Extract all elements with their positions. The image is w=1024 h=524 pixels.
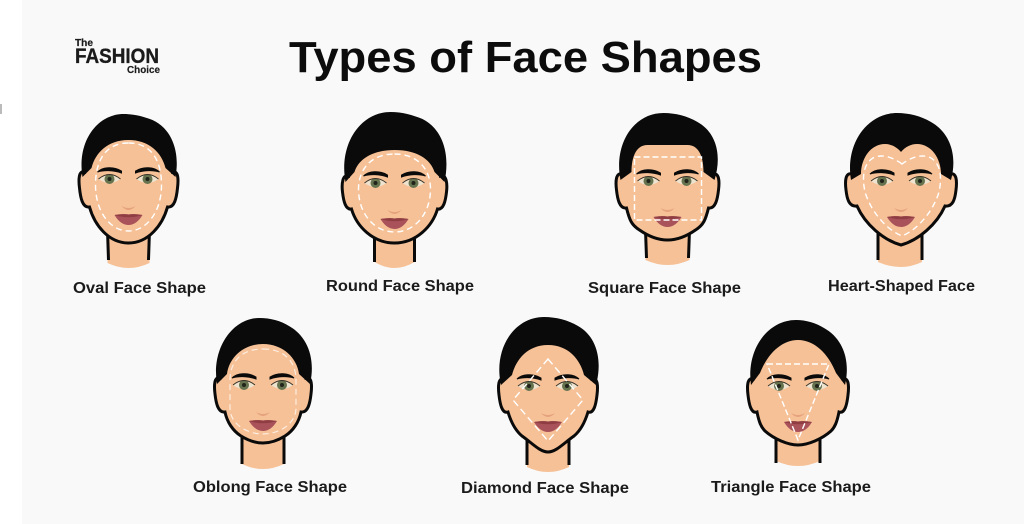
label: oval: Oval Face Shape bbox=[73, 280, 206, 297]
edge mark bbox=[0, 104, 2, 114]
label: triangle: Triangle Face Shape bbox=[711, 479, 871, 496]
face: oval bbox=[79, 114, 178, 268]
label: diamond: Diamond Face Shape bbox=[461, 480, 629, 497]
logo: The Fashion Choice: FASHION bbox=[75, 45, 159, 68]
face: diamond bbox=[499, 317, 599, 472]
logo: The Fashion Choice: The bbox=[75, 37, 93, 49]
face: oblong bbox=[215, 318, 312, 469]
face: triangle bbox=[748, 320, 848, 466]
logo: The Fashion Choice: Choice bbox=[127, 65, 160, 76]
label: round: Round Face Shape bbox=[326, 278, 474, 295]
label: oblong: Oblong Face Shape bbox=[193, 479, 347, 496]
face: round bbox=[342, 112, 447, 268]
label: square: Square Face Shape bbox=[588, 280, 741, 297]
logo: The Fashion Choice bbox=[75, 37, 160, 76]
face: square bbox=[616, 113, 719, 265]
face: heart bbox=[846, 113, 956, 267]
label: heart: Heart-Shaped Face bbox=[828, 278, 975, 295]
title: Types of Face Shapes bbox=[289, 33, 762, 82]
